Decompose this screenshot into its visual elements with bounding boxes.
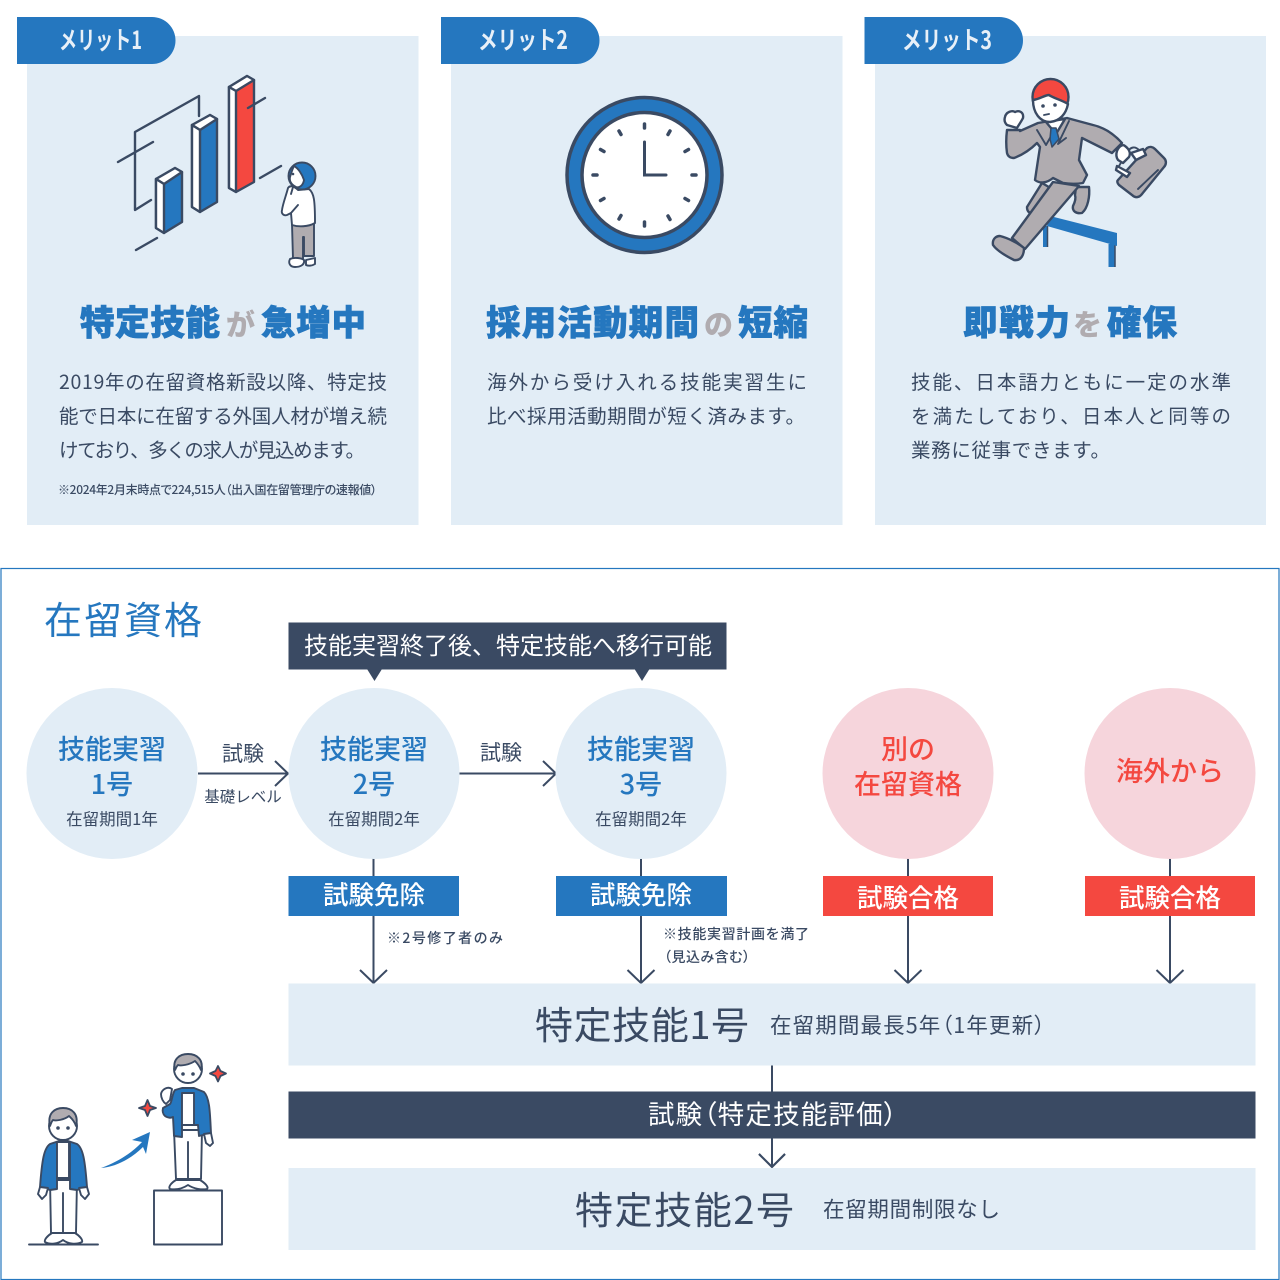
circle: intern 3: [556, 688, 726, 859]
badge: exam passed overseas: [1085, 876, 1255, 916]
circle: other status: 在留資格: [854, 763, 962, 802]
panel: merit 3: [864, 17, 1266, 525]
tab: merit 1: メリット1: [59, 21, 142, 57]
text: merit 1 body: けており、多くの求人が見込めます。: [59, 434, 365, 463]
circle: intern 2: 2号: [353, 763, 395, 802]
arrow: step up: [101, 1132, 150, 1168]
label: exam 2: 試験: [480, 737, 522, 767]
circle: intern 2: 在留期間2年: [328, 806, 420, 830]
text: merit 3 body: 業務に従事できます。: [911, 434, 1110, 463]
label: basic level: 基礎レベル: [204, 785, 282, 807]
text: merit 3 body: を満たしており、日本人と同等の: [911, 400, 1231, 429]
heading: merit 3: 確保: [1107, 295, 1178, 345]
circle: intern 2: [288, 688, 460, 859]
heading: residence status: 在留資格: [44, 590, 202, 645]
note: plan: ※技能実習計画を満了: [663, 924, 809, 944]
badge: exam exempt 3: 試験免除: [590, 875, 692, 912]
heading: merit 1: が: [226, 302, 255, 344]
circle: intern 1: 1号: [91, 763, 133, 802]
box: specified skill 2: 特定技能2号: [575, 1180, 794, 1235]
box: specified skill 1: 特定技能1号: [535, 995, 749, 1050]
badge: exam passed overseas: 試験合格: [1119, 878, 1221, 915]
note: plan: [663, 924, 809, 967]
note: 2 only: ※2号修了者のみ: [387, 928, 503, 948]
connector lines and arrows: [198, 761, 1184, 1167]
badge: exam exempt 2: [288, 875, 459, 916]
tab: merit 1: [17, 17, 176, 64]
box: specified skill 1: 在留期間最長5年（1年更新）: [770, 1009, 1045, 1040]
text: merit 2 body: 海外から受け入れる技能実習生に: [487, 366, 807, 395]
badge: exam exempt 2: 試験免除: [323, 875, 425, 912]
callout: transition banner: 技能実習終了後、特定技能へ移行可能: [304, 626, 712, 661]
label: exam 1: 試験: [222, 738, 264, 768]
person on box: [154, 1054, 222, 1244]
text: merit 2 body: [487, 366, 807, 429]
panel: merit 2: [441, 17, 842, 525]
heading: merit 2: 採用活動期間: [486, 295, 699, 345]
text: merit 3 body: [911, 366, 1231, 463]
circle: intern 1: 技能実習: [58, 728, 166, 767]
circle: intern 1: [26, 688, 198, 859]
heading: merit 2: の: [704, 302, 733, 344]
panel: residence status: [1, 568, 1279, 1280]
badge: exam passed other: 試験合格: [857, 878, 959, 915]
callout: transition banner: [288, 622, 726, 681]
circle: from overseas: [1084, 688, 1256, 859]
box: specified skill 2: [288, 1168, 1256, 1250]
circle: intern 2: 技能実習: [320, 728, 428, 767]
heading: merit 3: を: [1073, 302, 1102, 344]
circle: from overseas: 海外から: [1116, 750, 1224, 789]
person on ground: [29, 1108, 98, 1244]
circle: other status: [822, 688, 994, 859]
circle: intern 3: 3号: [620, 763, 662, 802]
text: merit 3 body: 技能、日本語力ともに一定の水準: [911, 366, 1231, 395]
tab: merit 2: メリット2: [478, 21, 568, 57]
text: merit 1 body: 能で日本に在留する外国人材が増え続: [59, 400, 387, 429]
circle: other status: 別の: [881, 728, 935, 767]
circle: intern 3: 在留期間2年: [595, 806, 687, 830]
tab: merit 2: [441, 17, 600, 64]
text: merit 2 body: 比べ採用活動期間が短く済みます。: [487, 400, 805, 429]
note: merit 1: ※2024年2月末時点で224,515人（出入国在留管理庁の速報値）: [58, 481, 377, 498]
badge: exam exempt 3: [556, 875, 727, 916]
circle: intern 3: 技能実習: [587, 728, 695, 767]
tab: merit 3: [864, 17, 1023, 64]
sparkle left: [139, 1100, 156, 1116]
heading: merit 1: [80, 295, 366, 345]
bar: exam evaluation: [288, 1092, 1256, 1138]
icon: bar chart with person: [118, 76, 316, 267]
note: plan: （見込み含む）: [664, 947, 750, 967]
tab: merit 3: メリット3: [902, 21, 992, 57]
text: merit 1 body: 2019年の在留資格新設以降、特定技: [59, 366, 387, 395]
icon: person stepping up: [29, 1054, 226, 1244]
icon: clock: [567, 98, 722, 252]
heading: merit 1: 特定技能: [80, 295, 220, 345]
circle: intern 1: 在留期間1年: [66, 806, 158, 830]
box: specified skill 2: 在留期間制限なし: [823, 1193, 1000, 1224]
heading: merit 2: 短縮: [738, 295, 808, 345]
sparkle right: [210, 1066, 226, 1082]
heading: merit 1: 急増中: [261, 295, 366, 345]
bar: exam evaluation: 試験（特定技能評価）: [648, 1093, 897, 1132]
heading: merit 3: [963, 295, 1178, 345]
box: specified skill 1: [288, 984, 1256, 1066]
heading: merit 2: [486, 295, 808, 345]
text: merit 1 body: [59, 366, 387, 463]
panel: merit 1: [17, 17, 418, 525]
icon: businessman hurdling: [993, 79, 1166, 267]
heading: merit 3: 即戦力: [963, 295, 1070, 345]
badge: exam passed other: [823, 876, 993, 916]
